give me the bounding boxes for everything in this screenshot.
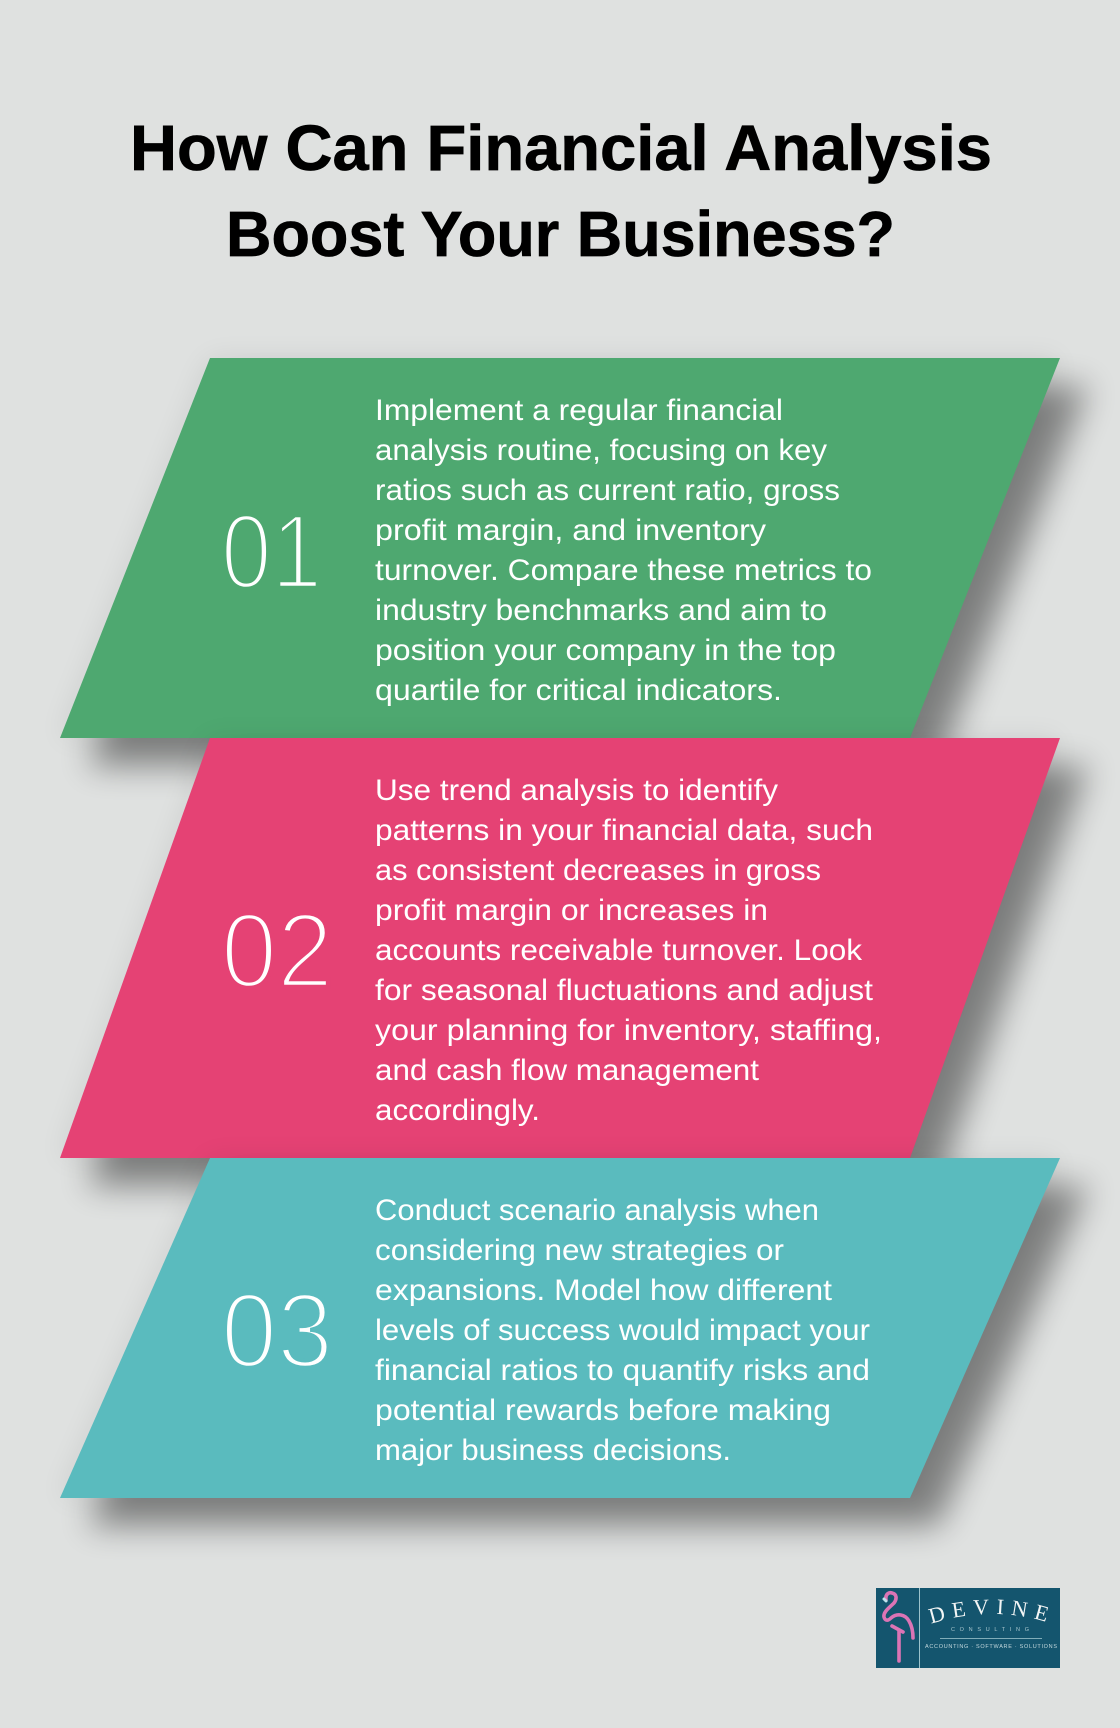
text block: step 03: considering new strategies or <box>375 1234 784 1267</box>
title <box>130 112 992 270</box>
panel: step 02 <box>60 738 1088 1186</box>
icon: flamingo <box>884 1593 913 1661</box>
text block: step 01: profit margin, and inventory <box>375 514 766 547</box>
title: Boost Your Business? <box>226 198 895 270</box>
text block: step 03: major business decisions. <box>375 1434 731 1467</box>
number 03: 03 <box>221 1272 333 1390</box>
text block: step 01 <box>375 394 872 707</box>
text block: step 01: ratios such as current ratio, gross <box>375 474 840 507</box>
text block: step 02: your planning for inventory, staffing, <box>375 1014 882 1047</box>
text block: step 01: turnover. Compare these metrics to <box>375 554 872 587</box>
number 02: 02 <box>221 892 333 1010</box>
title: How Can Financial Analysis <box>130 112 992 184</box>
logo wordmark: DEVINE <box>928 1600 1048 1624</box>
panel: step 03 <box>60 1158 1088 1526</box>
logo: Devine Consulting <box>876 1588 1060 1668</box>
panel: step 01 <box>60 358 1088 766</box>
text block: step 02: as consistent decreases in gross <box>375 854 821 887</box>
text block: step 03: potential rewards before making <box>375 1394 831 1427</box>
logo subtitle: CONSULTING <box>951 1627 1029 1633</box>
text block: step 02 <box>375 774 882 1127</box>
logo tagline: ACCOUNTING · SOFTWARE · SOLUTIONS <box>925 1644 1057 1650</box>
text block: step 03: Conduct scenario analysis when <box>375 1194 819 1227</box>
text block: step 03: financial ratios to quantify risks and <box>375 1354 870 1387</box>
text block: step 03: expansions. Model how different <box>375 1274 833 1307</box>
text block: step 02: accounts receivable turnover. Look <box>375 934 863 967</box>
text block: step 03: levels of success would impact your <box>375 1314 870 1347</box>
text block: step 03 <box>375 1194 870 1467</box>
text block: step 01: quartile for critical indicators. <box>375 674 782 707</box>
text block: step 01: Implement a regular financial <box>375 394 783 427</box>
text block: step 02: and cash flow management <box>375 1054 760 1087</box>
text block: step 01: analysis routine, focusing on key <box>375 434 827 467</box>
text block: step 01: industry benchmarks and aim to <box>375 594 827 627</box>
text block: step 02: accordingly. <box>375 1094 540 1127</box>
text block: step 02: profit margin or increases in <box>375 894 768 927</box>
text block: step 02: patterns in your financial data, such <box>375 814 873 847</box>
text block: step 02: Use trend analysis to identify <box>375 774 778 807</box>
number 01: 01 <box>221 493 322 611</box>
text block: step 01: position your company in the top <box>375 634 836 667</box>
text block: step 02: for seasonal fluctuations and adjust <box>375 974 874 1007</box>
